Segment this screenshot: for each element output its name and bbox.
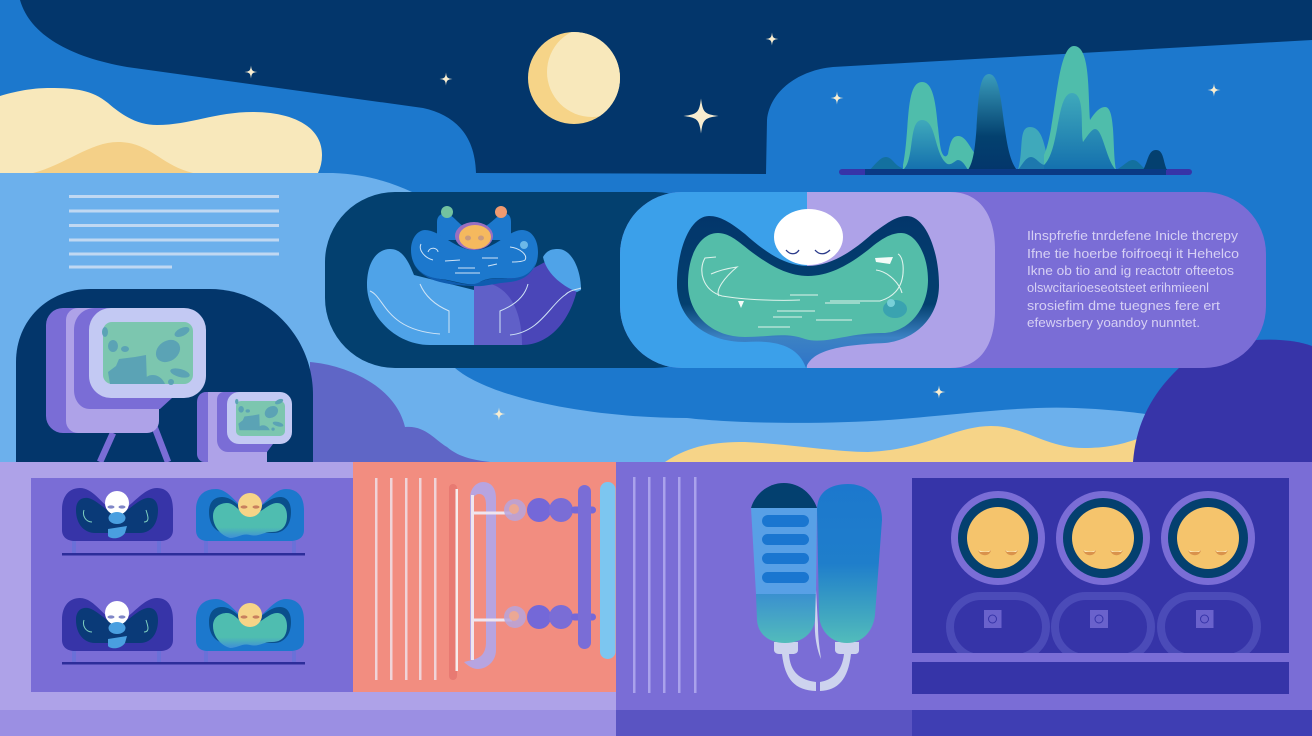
text block xyxy=(1027,228,1239,330)
panel: salmon xyxy=(353,462,616,692)
stripes xyxy=(633,477,696,693)
faces row xyxy=(951,491,1255,585)
icon: small monitor xyxy=(197,392,292,462)
panel: monitors xyxy=(16,289,313,462)
waveform chart xyxy=(839,46,1192,175)
panel: purple cards xyxy=(31,478,353,692)
text block: Ilnspfrefie tnrdefene Inicle thcrepy xyxy=(1027,228,1239,243)
shelf row 2 xyxy=(62,662,305,664)
bottom bar xyxy=(912,662,1289,694)
shelf row 1 xyxy=(62,553,305,556)
yellow dune xyxy=(33,142,193,173)
panel: faces xyxy=(912,478,1289,694)
icon: hook handle xyxy=(464,482,496,669)
right hill xyxy=(1133,340,1312,462)
panel: dark pill xyxy=(325,192,725,368)
icon: lower bead xyxy=(504,605,596,629)
control buttons xyxy=(984,610,1214,628)
icon: navy basin row 1 xyxy=(62,488,173,553)
light blue wave xyxy=(0,173,1146,462)
bottom sand xyxy=(665,426,1137,462)
text block: efewsrbery yoandoy nunntet. xyxy=(1027,315,1200,330)
icon: navy basin row 2 xyxy=(62,598,173,663)
icon: hands holding water xyxy=(367,206,581,345)
panel: right lower band xyxy=(616,462,1312,710)
night sky xyxy=(20,0,1312,174)
panel: text pill xyxy=(620,192,1266,368)
left hill xyxy=(310,362,490,462)
text block: Ifne tie hoerbe foifroeqi it Hehelco xyxy=(1027,246,1239,261)
lower band xyxy=(0,462,616,710)
text block: srosiefim dme tuegnes fere ert xyxy=(1027,298,1220,313)
footer strip left xyxy=(0,710,616,736)
control rings xyxy=(950,596,1257,658)
footer strip middle xyxy=(616,710,912,736)
footer strip right xyxy=(912,710,1312,736)
icon: green basin row 2 xyxy=(196,599,304,663)
text block: olswcitarioeseotsteet erihmieenl xyxy=(1027,280,1209,295)
text block: Ikne ob tio and ig reactotr ofteetos xyxy=(1027,263,1235,278)
sand dune xyxy=(0,88,322,173)
stars xyxy=(244,32,1220,420)
icon: sleeping figure in basin xyxy=(677,209,939,368)
text lines placeholder xyxy=(69,195,279,268)
moon xyxy=(528,32,620,124)
icon: capsule device xyxy=(751,483,882,691)
icon: upper bead xyxy=(504,498,596,522)
icon: large monitor xyxy=(46,308,206,462)
icon: green basin row 1 xyxy=(196,489,304,553)
